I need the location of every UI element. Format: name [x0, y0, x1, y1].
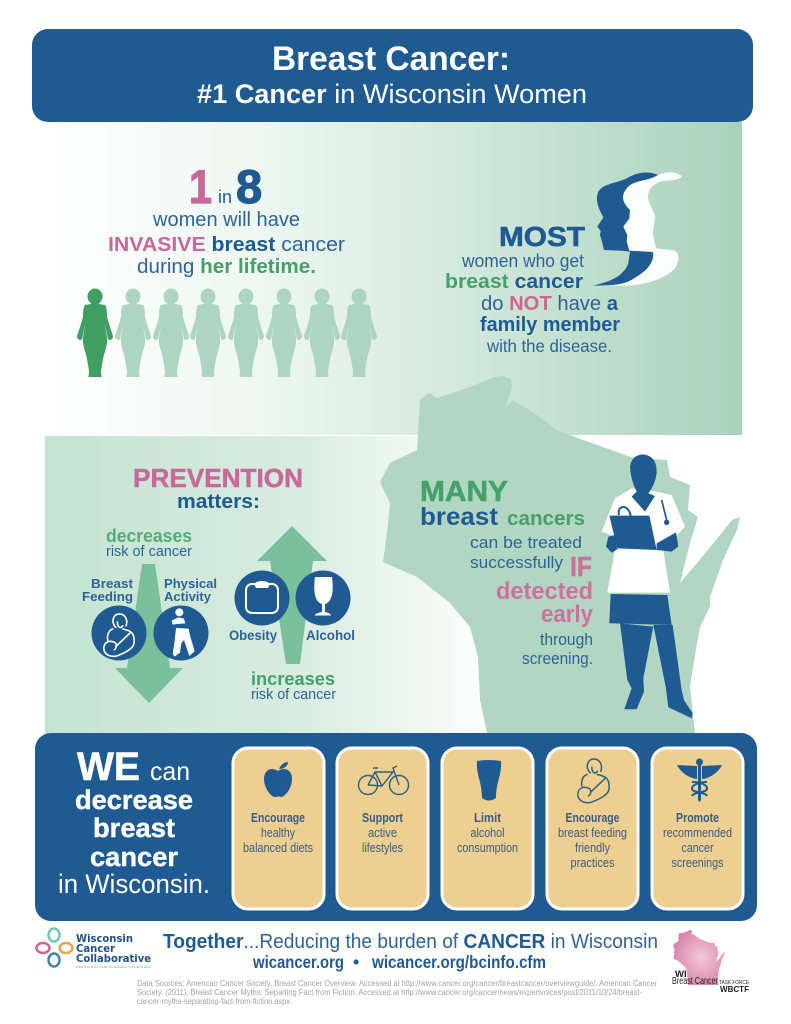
map: Wisconsin silhouette [380, 376, 740, 733]
text: encourage breast feeding friendly practices: practices [570, 856, 614, 870]
links: website addresses: wicancer.org/bcinfo.cfm [371, 952, 546, 972]
logo: WI Breast Cancer Task Force: Breast Cancer [672, 976, 718, 987]
logo: Wisconsin Cancer Collaborative: Wisconsin [76, 932, 133, 945]
icon: physical activity circle [154, 606, 208, 660]
text block: we can decrease breast cancer in Wisconsin: WE [77, 745, 140, 789]
logo: Wisconsin Cancer Collaborative: Cancer [76, 942, 116, 955]
text block: 1 in 8 statistic: INVASIVE breast cancer [108, 233, 345, 256]
text block: many breast cancers: detected [496, 578, 593, 605]
text block: we can decrease breast cancer in Wisconsin [58, 745, 210, 899]
arrow: decreases risk [115, 564, 183, 703]
text block: data sources: Society. (2011). Breast Cancer Myths: Separting Fact from Fiction. Accessed at http://www.cancer.org/cancer/news/expertvoices/post/2011/10/24/breast- [137, 988, 642, 997]
label: physical activity [164, 576, 217, 604]
logo: Wisconsin Cancer Collaborative: REDUCING THE BURDEN TOGETHER [76, 965, 151, 969]
text: limit alcohol consumption [457, 811, 518, 855]
text: encourage healthy balanced diets: balanced diets [243, 841, 313, 855]
arrow: increases risk [257, 526, 327, 664]
heading: prevention matters: PREVENTION [133, 463, 303, 493]
figure: woman 7 [304, 288, 340, 377]
text block: we can decrease breast cancer in Wisconsin: can [150, 756, 190, 786]
figure: nurse silhouette [602, 454, 693, 718]
icon: alcohol glass circle [296, 570, 350, 626]
text block: many breast cancers: cancers [507, 508, 585, 530]
text block: many breast cancers: early [541, 601, 594, 628]
text block: 1 in 8 statistic: during her lifetime. [137, 256, 316, 278]
text block: data sources: cancer-myths-separating-fact-from-fiction.aspx. [137, 997, 292, 1006]
links: website addresses [252, 952, 546, 972]
figure: woman 5 [228, 288, 264, 377]
label: increases risk of cancer: risk of cancer [251, 686, 336, 703]
label: decreases risk of cancer: risk of cancer [106, 543, 192, 560]
label: physical activity: Physical [164, 576, 217, 591]
text block: most women: women who get [461, 251, 584, 271]
pictogram: eight women [77, 288, 377, 377]
text: support active lifestyles: active [368, 826, 397, 840]
text block: we can decrease breast cancer in Wisconsin: in Wisconsin. [58, 869, 210, 899]
text: support active lifestyles: lifestyles [362, 841, 403, 855]
logo: WI Breast Cancer Task Force: WBCTF [720, 984, 749, 994]
links: website addresses: wicancer.org [252, 952, 344, 972]
text block: we can decrease breast cancer in Wisconsin: breast [93, 813, 175, 843]
icon: breast feeding circle [92, 606, 146, 660]
label: obesity: Obesity [229, 628, 277, 643]
text block: we can decrease breast cancer in Wisconsin: cancer [90, 842, 178, 872]
figure: woman 6 [266, 288, 302, 377]
icon: beer glass [477, 760, 501, 800]
icon: knot loops [36, 928, 72, 966]
text block: most women [445, 221, 620, 356]
card: alcohol [442, 748, 533, 909]
logo: Wisconsin Cancer Collaborative [36, 928, 151, 969]
icon: caduceus [677, 758, 722, 802]
text: promote recommended cancer screenings: cancer [682, 841, 714, 855]
panel: we can decrease [35, 733, 757, 921]
heading: prevention matters [133, 463, 303, 513]
panel: lower background [45, 436, 645, 734]
logo: WI Breast Cancer Task Force: WI [675, 969, 687, 980]
tagline: together reducing the burden: Together...Reducing the burden of CANCER in Wisconsin [163, 931, 658, 953]
text block: many breast cancers: can be treated [470, 533, 582, 552]
label: alcohol: Alcohol [306, 628, 355, 643]
text: encourage healthy balanced diets: healthy [261, 826, 296, 840]
icon: bicycle [358, 766, 408, 794]
panel: top background [45, 122, 742, 435]
label: increases risk of cancer: increases [251, 669, 335, 689]
text: encourage healthy balanced diets: Encourage [251, 811, 305, 825]
links: website addresses: • [353, 952, 359, 972]
text: support active lifestyles [362, 811, 404, 855]
logo: Wisconsin Cancer Collaborative: Collaborative [76, 952, 151, 965]
label: increases risk of cancer [251, 669, 336, 703]
card: screenings [652, 748, 743, 909]
figure: woman 8 [341, 288, 377, 377]
text block: many breast cancers [420, 476, 594, 668]
text block: data sources [137, 979, 657, 1006]
text block: many breast cancers: MANY [420, 476, 508, 508]
icon: obesity scale circle [234, 570, 290, 626]
title banner: Breast Cancer: [272, 40, 510, 78]
label: decreases risk of cancer [106, 526, 192, 560]
text: limit alcohol consumption: consumption [457, 841, 518, 855]
icon: mother and baby [578, 759, 609, 803]
text: promote recommended cancer screenings: Promote [676, 811, 719, 825]
text block: many breast cancers: successfully [470, 553, 564, 572]
text: promote recommended cancer screenings: screenings [672, 856, 724, 870]
text block: most women: family member [480, 314, 620, 336]
figure: woman 2 [115, 288, 151, 377]
text block: 1 in 8 statistic [108, 160, 345, 278]
icon: apple [264, 762, 292, 797]
text: promote recommended cancer screenings [663, 811, 732, 870]
text block: many breast cancers: screening. [522, 649, 593, 668]
text: encourage breast feeding friendly practices: friendly [575, 841, 611, 855]
card: lifestyles [337, 748, 428, 909]
text block: 1 in 8 statistic: 1 [189, 160, 212, 213]
figure: highlighted woman [77, 288, 113, 377]
text: encourage breast feeding friendly practices: breast feeding [558, 826, 627, 840]
text: promote recommended cancer screenings: recommended [663, 826, 732, 840]
text: encourage breast feeding friendly practices: Encourage [566, 811, 620, 825]
text block: most women: do NOT have a [481, 293, 619, 315]
logo: WI Breast Cancer Task Force [672, 930, 749, 994]
logo: WI Breast Cancer Task Force: TASK FORCE [719, 980, 749, 986]
text block: we can decrease breast cancer in Wisconsin: decrease [75, 785, 193, 815]
text block: most women: MOST [499, 221, 585, 252]
label: breast feeding [82, 576, 134, 604]
card: diets [233, 748, 324, 909]
text block: 1 in 8 statistic: 8 [236, 160, 262, 213]
text block: most women: breast cancer [445, 271, 583, 293]
figure: woman 3 [153, 288, 189, 377]
text block: 1 in 8 statistic: women will have [152, 209, 300, 231]
label: breast feeding: Breast [91, 576, 134, 591]
text: limit alcohol consumption: Limit [474, 811, 502, 825]
text block: most women: with the disease. [486, 336, 612, 356]
label: breast feeding: Feeding [82, 589, 133, 604]
title banner: #1 Cancer in Wisconsin Women [197, 79, 587, 109]
text block: many breast cancers: breast [420, 503, 499, 531]
title banner [32, 29, 753, 122]
icon: overlapping face profiles [593, 172, 682, 286]
heading: prevention matters: matters: [177, 491, 260, 513]
text: encourage healthy balanced diets [243, 811, 313, 855]
text block: data sources: Data Sources: American Cancer Society, Breast Cancer Overview. Accessed at http://www.cancer.org/cancer/breastcancer/overviewguide/. American Cancer [137, 979, 657, 988]
text: encourage breast feeding friendly practices [558, 811, 627, 870]
text: support active lifestyles: Support [362, 811, 404, 825]
text block: 1 in 8 statistic: in [218, 187, 232, 207]
label: physical activity: Activity [164, 589, 212, 604]
label: decreases risk of cancer: decreases [106, 526, 192, 546]
text block: many breast cancers: through [540, 630, 593, 649]
figure: woman 4 [190, 288, 226, 377]
card: breast feeding [547, 748, 638, 909]
text: limit alcohol consumption: alcohol [470, 826, 504, 840]
text block: many breast cancers: IF [570, 551, 592, 582]
